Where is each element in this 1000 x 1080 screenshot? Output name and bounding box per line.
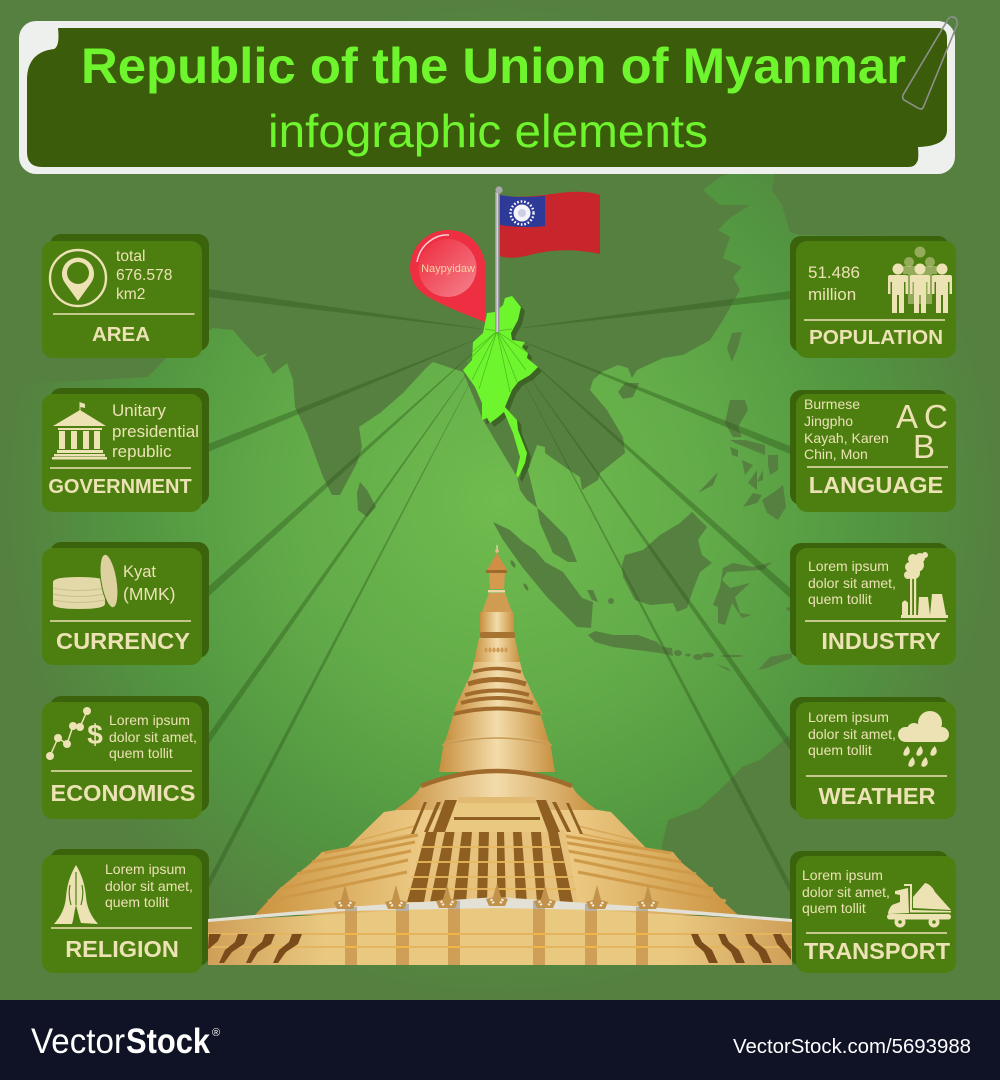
finials: [334, 883, 659, 909]
panel: population: POPULATION: [809, 326, 943, 349]
footer image id: VectorStock.com/5693988: [733, 1036, 971, 1058]
panel: population: million: [808, 285, 856, 304]
panel: language: Kayah, Karen: [804, 430, 889, 446]
white parapet: [208, 897, 792, 922]
panel: area: total: [116, 248, 145, 265]
terraces: [255, 806, 738, 915]
footer logo: Stock: [126, 1022, 210, 1061]
bell base: [395, 771, 597, 810]
panel: area: AREA: [92, 323, 150, 346]
base wall: [208, 905, 792, 965]
panel: government: Unitary: [112, 401, 166, 420]
panel: government: presidential: [112, 422, 199, 441]
pilaster bands: [345, 933, 648, 948]
icon: group of people: [888, 246, 952, 313]
panel: population: 51.486: [808, 263, 860, 282]
panel: religion: RELIGION: [65, 936, 179, 962]
panel: language: [790, 390, 956, 512]
panel: industry: INDUSTRY: [821, 628, 941, 654]
panel: economics: dolor sit amet,: [109, 729, 197, 745]
panel: transport: quem tollit: [802, 900, 866, 916]
panel: area: km2: [116, 286, 145, 303]
map pin: Naypyidaw: [410, 230, 486, 322]
flag of Myanmar: [500, 192, 600, 258]
footer logo: Vector: [31, 1022, 125, 1061]
panel: weather: dolor sit amet,: [808, 726, 896, 742]
paperclip: [903, 17, 957, 109]
panel: weather: quem tollit: [808, 742, 872, 758]
stairway dark stripes: [407, 800, 583, 902]
pagoda: [208, 545, 792, 965]
panel: government: [42, 388, 209, 512]
panel: industry: [790, 543, 956, 665]
title banner: [19, 21, 955, 174]
panel: language: LANGUAGE: [809, 472, 943, 498]
footer bar: [0, 1000, 1000, 1080]
panel: currency: (MMK): [123, 584, 175, 604]
panel: economics: Lorem ipsum: [109, 712, 190, 728]
flagpole: [495, 186, 503, 332]
panel: transport: TRANSPORT: [804, 938, 951, 964]
icon: rain cloud: [898, 711, 949, 768]
brown arches: [208, 934, 791, 963]
panel: currency: Kyat: [123, 563, 156, 581]
panel: currency: CURRENCY: [56, 628, 190, 654]
panel: transport: dolor sit amet,: [802, 884, 890, 900]
panel: weather: [790, 697, 956, 819]
icon: letters A B C: [896, 398, 948, 465]
panel: economics: [42, 696, 209, 819]
panel: economics: ECONOMICS: [51, 780, 195, 806]
subtitle: infographic elements: [268, 105, 708, 157]
panel: area: [42, 234, 209, 358]
panel: language: Burmese: [804, 396, 860, 412]
icon: letters A B C: A: [896, 398, 918, 435]
icon: economics growth chart: $: [87, 719, 103, 750]
panel: transport: Lorem ipsum: [802, 867, 883, 883]
panel: area: 676.578: [116, 267, 172, 284]
connector lines from Myanmar to panels: [208, 289, 790, 893]
panel: religion: [42, 849, 209, 973]
map pin: Naypyidaw: Naypyidaw: [421, 263, 475, 275]
icon: factory: [901, 552, 948, 618]
panel: weather: WEATHER: [818, 783, 936, 809]
icon: government building: [52, 402, 107, 460]
icon: letters A B C: C: [924, 398, 948, 435]
parapet shadows: [345, 901, 648, 911]
panel: language: Chin, Mon: [804, 446, 868, 462]
spire: [439, 545, 555, 772]
panel: government: republic: [112, 442, 172, 461]
central stairway panel: [415, 830, 578, 903]
main title: Republic of the Union of Myanmar: [81, 38, 906, 94]
panel: transport: [790, 851, 956, 973]
panel: economics: quem tollit: [109, 745, 173, 761]
panel: religion: dolor sit amet,: [105, 878, 193, 894]
Myanmar country map: [463, 296, 542, 482]
icon: dump truck: [887, 883, 951, 928]
pilasters: [345, 905, 648, 965]
icon: location pin: [50, 250, 106, 306]
icon: letters A B C: B: [913, 428, 935, 465]
panel: industry: dolor sit amet,: [808, 575, 896, 591]
panel: religion: Lorem ipsum: [105, 861, 186, 877]
panel: government: GOVERNMENT: [48, 476, 192, 498]
icon: praying hands: [54, 865, 98, 924]
panel: industry: quem tollit: [808, 591, 872, 607]
icon: economics growth chart: [46, 707, 103, 760]
panel: weather: Lorem ipsum: [808, 709, 889, 725]
footer logo: ®: [212, 1027, 220, 1039]
icon: coins: [53, 553, 121, 609]
footer logo: [31, 1022, 220, 1061]
panel: currency: [42, 542, 209, 665]
panel: religion: quem tollit: [105, 894, 169, 910]
panel: industry: Lorem ipsum: [808, 558, 889, 574]
panel: population: [790, 236, 956, 358]
panel: language: Jingpho: [804, 413, 853, 429]
world map silhouette: [0, 172, 1000, 1000]
